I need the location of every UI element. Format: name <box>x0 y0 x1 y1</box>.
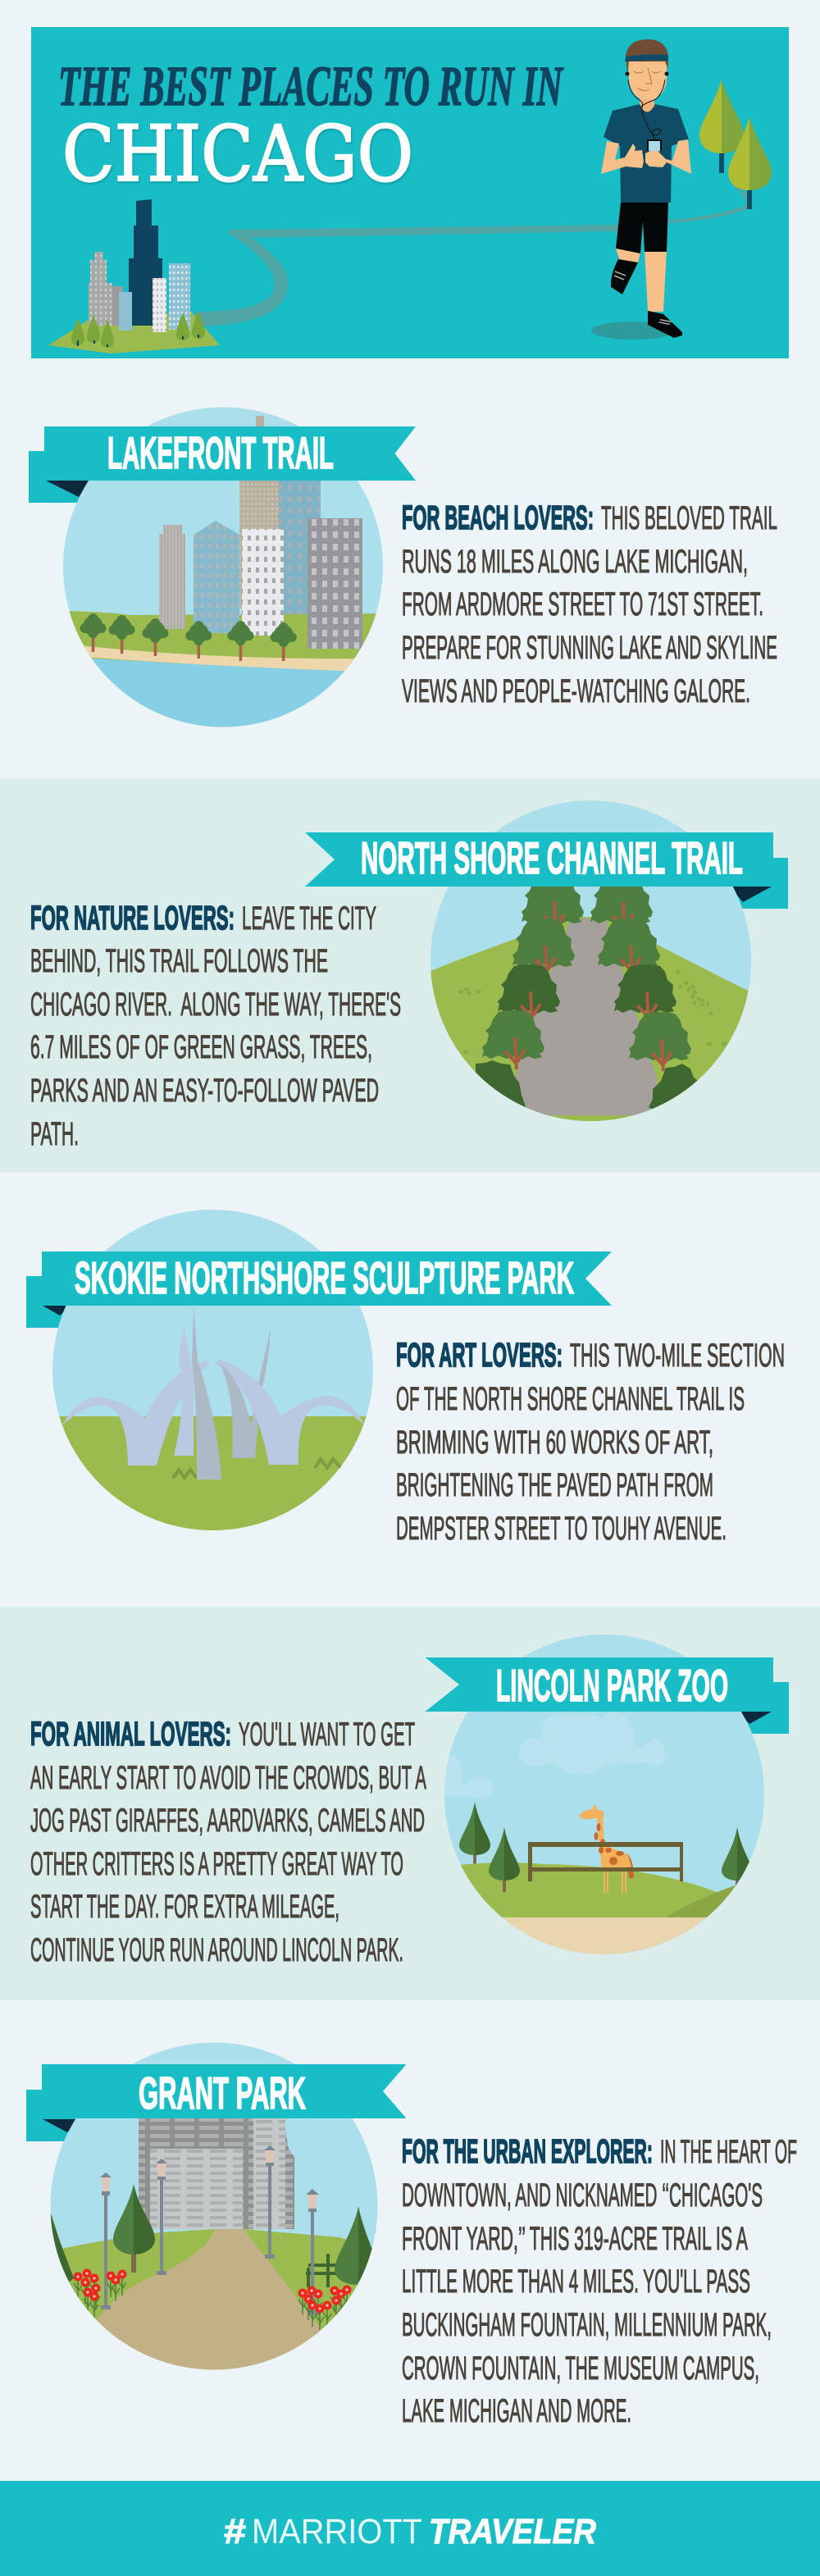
right back spike <box>250 1329 271 1458</box>
grass <box>49 1416 377 1535</box>
section band <box>0 1607 820 2000</box>
illustration: tree-lined path <box>426 800 758 1132</box>
runner <box>591 39 691 340</box>
footer <box>0 2481 820 2576</box>
sky circle <box>63 407 383 727</box>
ribbon title: GRANT PARK <box>139 2068 306 2118</box>
description: JOG PAST GIRAFFES, AARDVARKS, CAMELS AND <box>30 1803 425 1839</box>
grass <box>49 2229 385 2354</box>
panel: lakefront trail <box>29 407 777 738</box>
panel: grant park <box>26 2042 797 2429</box>
back buildings <box>139 2116 294 2229</box>
ribbon fold <box>43 1306 70 1315</box>
willis tower <box>129 199 162 326</box>
illustration: giraffe in the park <box>443 1635 771 1958</box>
description: BEHIND, THIS TRAIL FOLLOWS THE <box>30 943 328 979</box>
foreground trees <box>476 1060 526 1109</box>
ribbon title: LAKEFRONT TRAIL <box>107 427 334 478</box>
grass flecks <box>458 969 727 1055</box>
giraffe <box>580 1804 634 1893</box>
description: OTHER CRITTERS IS A PRETTY GREAT WAY TO <box>30 1846 403 1882</box>
left flowers <box>74 2268 126 2318</box>
grass <box>426 917 758 1132</box>
description: FOR BEACH LOVERS: <box>402 499 594 536</box>
title: chicago: CHICAGO <box>62 110 413 199</box>
ribbon <box>42 1252 612 1306</box>
diamond top tower <box>194 521 239 633</box>
right flowers <box>298 2285 351 2330</box>
fence <box>528 1842 683 1881</box>
illustration: lakefront skyline <box>57 407 385 738</box>
sky circle <box>52 1210 373 1530</box>
phone <box>647 139 662 151</box>
description: FOR NATURE LOVERS: <box>30 899 235 937</box>
description: START THE DAY. FOR EXTRA MILEAGE, <box>30 1889 339 1925</box>
standing leg and shoe <box>645 250 667 312</box>
description: PARKS AND AN EASY-TO-FOLLOW PAVED <box>30 1073 379 1109</box>
neck <box>640 92 654 115</box>
row of trees <box>80 613 297 661</box>
description <box>396 1336 785 1547</box>
dark hill <box>665 1885 754 1917</box>
ribbon back flap <box>730 858 788 909</box>
ribbon back flap <box>29 451 90 503</box>
shorts <box>616 203 668 253</box>
gravel path <box>74 2229 353 2378</box>
lamps <box>100 2145 319 2314</box>
description <box>30 899 401 1152</box>
light blue building <box>169 263 190 330</box>
beach <box>84 646 354 672</box>
description <box>30 1715 426 1968</box>
small grey building <box>112 286 123 326</box>
description: FOR ART LOVERS: <box>396 1336 563 1374</box>
description: AN EARLY START TO AVOID THE CROWDS, BUT A <box>30 1760 426 1796</box>
ribbon back flap <box>26 2090 82 2141</box>
tall center spike <box>192 1306 221 1479</box>
header background <box>31 27 789 358</box>
arms and hands <box>601 141 644 174</box>
back tree <box>113 2184 155 2273</box>
dark grey tower <box>308 518 362 649</box>
panel: north shore channel trail <box>0 778 820 1173</box>
illustration: park with skyline <box>45 2042 385 2378</box>
slim grey tower <box>159 525 185 629</box>
left spike <box>174 1328 194 1456</box>
section band <box>0 778 820 1173</box>
ribbon fold <box>738 1712 772 1724</box>
description: 6.7 MILES OF OF GREEN GRASS, TREES, <box>30 1029 372 1065</box>
small trees <box>71 311 205 348</box>
grey building <box>89 252 112 326</box>
sand path <box>443 1917 771 1958</box>
island ground <box>48 312 220 353</box>
ribbon <box>425 1657 773 1712</box>
front buildings <box>150 2149 243 2229</box>
ribbon <box>42 2064 407 2118</box>
large cloud <box>518 1712 666 1775</box>
park trees <box>699 80 772 209</box>
paved path <box>515 919 658 1115</box>
skyline island <box>48 199 220 353</box>
panel: lincoln park zoo <box>0 1607 820 2000</box>
ribbon fold <box>43 2119 82 2132</box>
left arches <box>62 1360 210 1466</box>
hill <box>443 1862 738 1919</box>
small cloud <box>443 1756 493 1799</box>
hashtag: # <box>224 2512 246 2551</box>
ribbon fold <box>46 481 90 497</box>
description: CHICAGO RIVER. ALONG THE WAY, THERE'S <box>30 987 401 1023</box>
ribbon back flap <box>26 1276 74 1328</box>
footer band <box>0 2481 820 2576</box>
ribbon fold <box>730 887 772 902</box>
right tree <box>335 2206 377 2285</box>
road winding to the skyline <box>195 182 750 326</box>
white building <box>153 278 166 332</box>
antenna <box>256 416 264 426</box>
description: YOU'LL WANT TO GET <box>239 1717 415 1753</box>
description <box>402 2132 797 2429</box>
ribbon back flap <box>738 1682 789 1734</box>
left tree <box>45 2214 74 2288</box>
panel: skokie northshore sculpture park <box>26 1210 785 1547</box>
right arches <box>215 1360 365 1465</box>
earphone cables <box>628 80 665 139</box>
description: CONTINUE YOUR RUN AROUND LINCOLN PARK. <box>30 1932 403 1968</box>
grass <box>57 611 385 668</box>
sky circle <box>51 2042 377 2370</box>
lake <box>92 658 344 727</box>
earbuds <box>625 72 630 75</box>
ribbon <box>305 832 773 887</box>
back tree trunk <box>473 1849 476 1867</box>
illustration: sculptures <box>49 1210 377 1535</box>
upper trees <box>522 887 584 923</box>
panel: header <box>31 27 789 358</box>
description <box>402 499 777 709</box>
lower trees <box>482 1010 544 1069</box>
sky circle <box>444 1635 764 1954</box>
description: FOR ANIMAL LOVERS: <box>30 1715 231 1753</box>
blue building <box>119 292 132 331</box>
traveler wordmark: TRAVELER <box>429 2512 596 2551</box>
raised leg and shoe <box>616 248 640 262</box>
shirt <box>604 104 689 203</box>
sky circle <box>430 800 751 1121</box>
head <box>628 57 667 100</box>
curved grey blade <box>220 1364 255 1458</box>
middle trees <box>498 964 560 1024</box>
ribbon <box>44 426 416 481</box>
ground shadow <box>591 321 675 340</box>
towers <box>279 481 321 614</box>
description: PATH. <box>30 1116 79 1152</box>
trees <box>459 1802 752 1892</box>
description: LEAVE THE CITY <box>242 900 376 937</box>
white tower <box>242 529 284 636</box>
bench <box>306 2254 345 2287</box>
grass marks <box>173 1459 341 1478</box>
marriott wordmark: MARRIOTT <box>252 2512 422 2551</box>
